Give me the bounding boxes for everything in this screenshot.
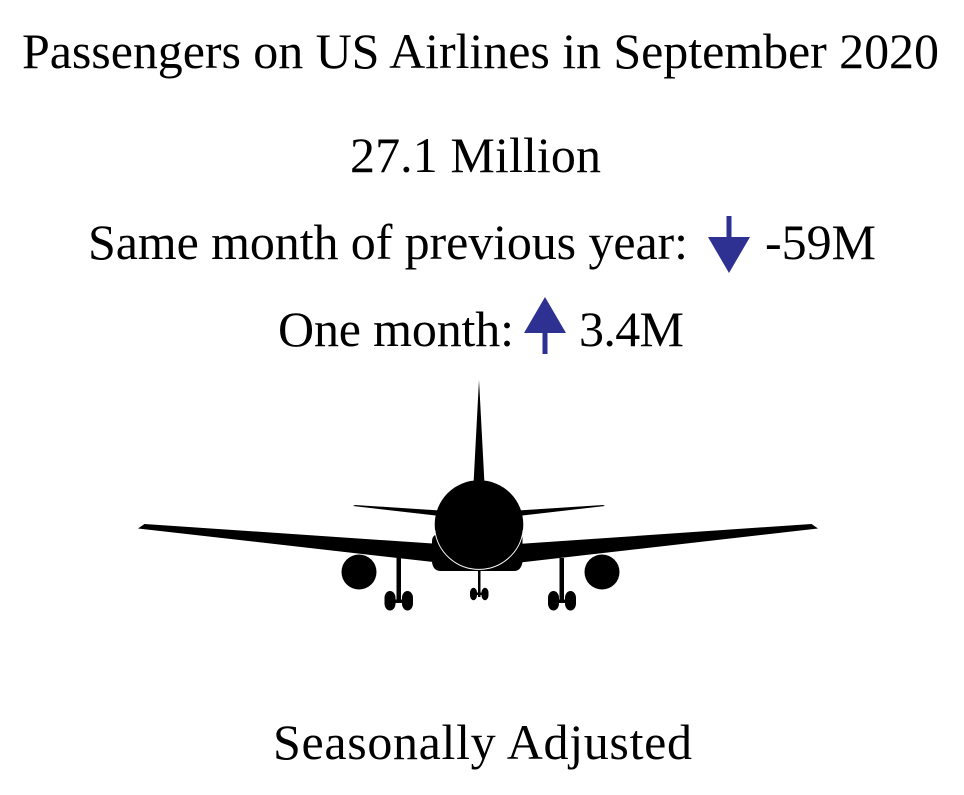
icon: up arrow bbox=[524, 297, 566, 354]
fuselage bbox=[435, 480, 523, 569]
icon: airplane front view bbox=[138, 380, 818, 610]
year-over-year comparison bbox=[88, 214, 876, 273]
label: same month of previous year: Same month of previous year: bbox=[88, 214, 688, 270]
value: year-over-year change: -59M bbox=[765, 214, 876, 270]
icon: down arrow bbox=[708, 216, 750, 273]
footnote: seasonally adjusted: Seasonally Adjusted bbox=[273, 714, 692, 770]
fuselage highlight bbox=[435, 530, 523, 569]
lower fuselage bbox=[432, 534, 522, 571]
engines bbox=[342, 554, 376, 590]
label: one month: One month: bbox=[278, 301, 514, 357]
left main landing gear bbox=[384, 558, 413, 610]
wings bbox=[138, 524, 818, 563]
horizontal stabilizers bbox=[353, 505, 605, 516]
title: Passengers on US Airlines in September 2020 bbox=[22, 23, 939, 79]
headline value: passengers: 27.1 Million bbox=[350, 127, 601, 183]
right main landing gear bbox=[548, 558, 576, 610]
tail fin bbox=[474, 380, 484, 484]
nose landing gear bbox=[470, 571, 488, 600]
value: month-over-month change: 3.4M bbox=[579, 301, 684, 357]
month-over-month comparison bbox=[278, 297, 684, 357]
